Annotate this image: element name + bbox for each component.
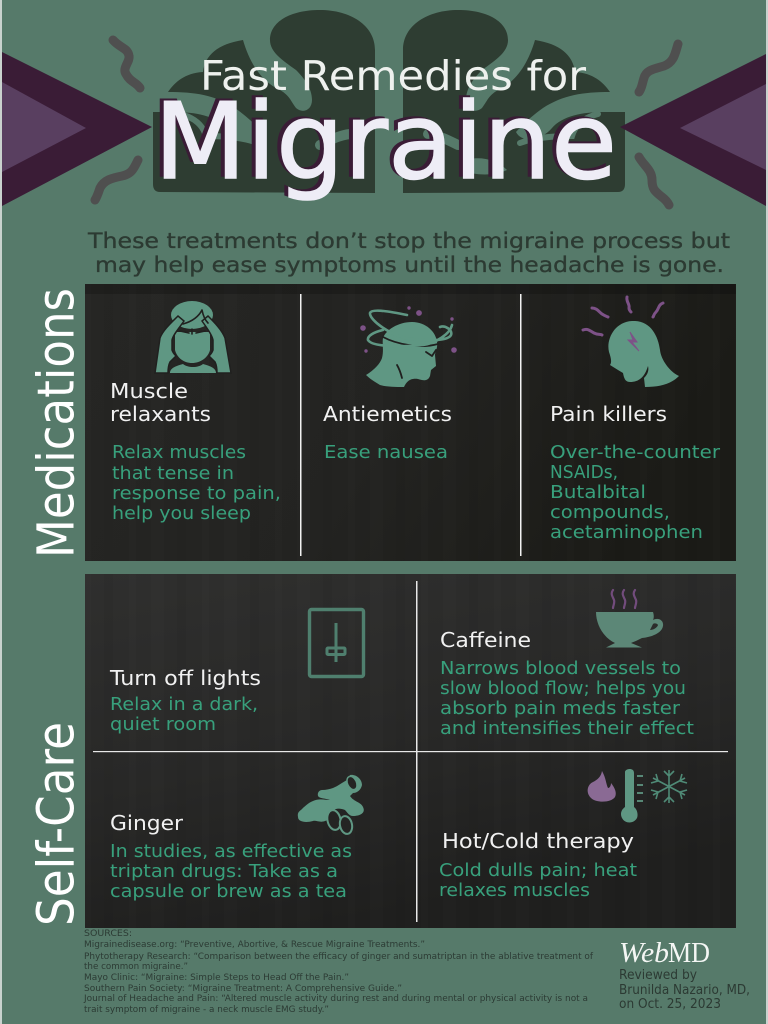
review credit: Brunilda Nazario, MD, xyxy=(619,983,750,998)
sources: the common migraine.” xyxy=(84,962,188,972)
description: Ginger: In studies, as effective as xyxy=(110,841,352,862)
sources: SOURCES: xyxy=(84,929,132,939)
title: Migraine xyxy=(150,79,613,201)
chevron: right xyxy=(620,54,766,206)
sources xyxy=(83,929,594,1015)
description: Pain killers: acetaminophen xyxy=(550,522,703,543)
logo: WebMD: Web xyxy=(619,937,669,969)
description: Pain killers: Butalbital xyxy=(550,482,646,503)
sources: Southern Pain Society: “Migraine Treatment: A Comprehensive Guide.” xyxy=(84,984,402,994)
icon: light switch xyxy=(310,610,364,676)
heading: Medications: Medications xyxy=(28,288,86,558)
icon: spinning head xyxy=(360,306,457,387)
description: Hot/Cold therapy xyxy=(439,860,637,901)
description: Muscle relaxants: response to pain, xyxy=(112,483,281,504)
description: Muscle relaxants: Relax muscles xyxy=(112,442,246,463)
label: Antiemetics: Antiemetics xyxy=(323,402,452,426)
description: Pain killers xyxy=(550,442,721,543)
description: Caffeine: and intensifies their effect xyxy=(440,718,694,739)
heading: Self-Care: Self-Care xyxy=(28,722,86,926)
description: Muscle relaxants xyxy=(112,442,281,524)
icon: hands on head xyxy=(155,301,231,373)
review credit: on Oct. 25, 2023 xyxy=(619,997,721,1012)
description: Hot/Cold therapy: Cold dulls pain; heat xyxy=(439,860,637,881)
description: Muscle relaxants: that tense in xyxy=(112,463,234,484)
sources: Migrainedisease.org: “Preventive, Abortive, & Rescue Migraine Treatments.” xyxy=(84,940,425,950)
logo: WebMD: MD xyxy=(668,937,710,969)
icon: head with pain xyxy=(583,297,679,387)
description: Turn off lights: quiet room xyxy=(110,714,216,735)
review credit: Reviewed by xyxy=(619,968,697,983)
description: Pain killers: compounds, xyxy=(550,502,670,523)
review credit xyxy=(619,968,750,1012)
label: Muscle relaxants xyxy=(110,379,211,426)
squiggle: top left xyxy=(113,40,140,88)
sources: trait symptom of migraine - a neck muscle EMG study.” xyxy=(84,1005,329,1015)
label: Caffeine: Caffeine xyxy=(440,628,531,652)
description: Ginger xyxy=(110,841,352,902)
description: Caffeine: slow blood flow; helps you xyxy=(440,678,686,699)
description: Antiemetics: Ease nausea xyxy=(324,442,448,463)
description: Hot/Cold therapy: relaxes muscles xyxy=(439,880,590,901)
label: Pain killers: Pain killers xyxy=(550,402,667,426)
description: Ginger: triptan drugs: Take as a xyxy=(110,861,338,882)
squiggle: bottom left xyxy=(95,160,138,200)
description: Muscle relaxants: help you sleep xyxy=(112,503,251,524)
squiggle: bottom right xyxy=(639,157,669,205)
label: Muscle relaxants: relaxants xyxy=(110,402,211,426)
chevron: left xyxy=(2,52,152,206)
label: Hot/Cold therapy: Hot/Cold therapy xyxy=(442,829,634,853)
squiggle: top right xyxy=(639,44,678,92)
title: Fast Remedies for xyxy=(200,52,586,100)
description: Turn off lights: Relax in a dark, xyxy=(110,694,258,715)
panel: self-care xyxy=(85,574,736,928)
description: Caffeine: Narrows blood vessels to xyxy=(440,658,681,679)
description: Ginger: capsule or brew as a tea xyxy=(110,881,347,902)
intro text xyxy=(87,229,730,278)
description: Caffeine: absorb pain meds faster xyxy=(440,698,681,719)
sources: Mayo Clinic: “Migraine: Simple Steps to Head Off the Pain.” xyxy=(84,973,349,983)
icon: coffee cup xyxy=(596,590,663,648)
intro text: may help ease symptoms until the headache is gone. xyxy=(95,253,724,278)
sources: Journal of Headache and Pain: “Altered muscle activity during rest and during mental or physical activity is not a xyxy=(83,994,588,1004)
logo: WebMD xyxy=(619,937,710,969)
panel: medications xyxy=(85,284,736,561)
title: Migraine xyxy=(154,81,617,203)
description: Pain killers: Over-the-counter xyxy=(550,442,721,463)
sources: Phytotherapy Research: “Comparison between the efficacy of ginger and sumatriptan in the ablative treatment of xyxy=(84,952,594,962)
illustration: brain silhouette xyxy=(153,10,625,193)
description: Caffeine xyxy=(440,658,694,739)
icon: flame, thermometer and snowflake xyxy=(588,769,687,822)
icon: ginger root xyxy=(298,775,364,835)
label: Turn off lights: Turn off lights xyxy=(109,666,261,690)
description: Turn off lights xyxy=(110,694,258,735)
label: Ginger: Ginger xyxy=(110,811,184,835)
label: Muscle relaxants: Muscle xyxy=(110,379,188,403)
description: Pain killers: NSAIDs, xyxy=(550,462,618,483)
intro text: These treatments don’t stop the migraine process but xyxy=(87,229,730,254)
